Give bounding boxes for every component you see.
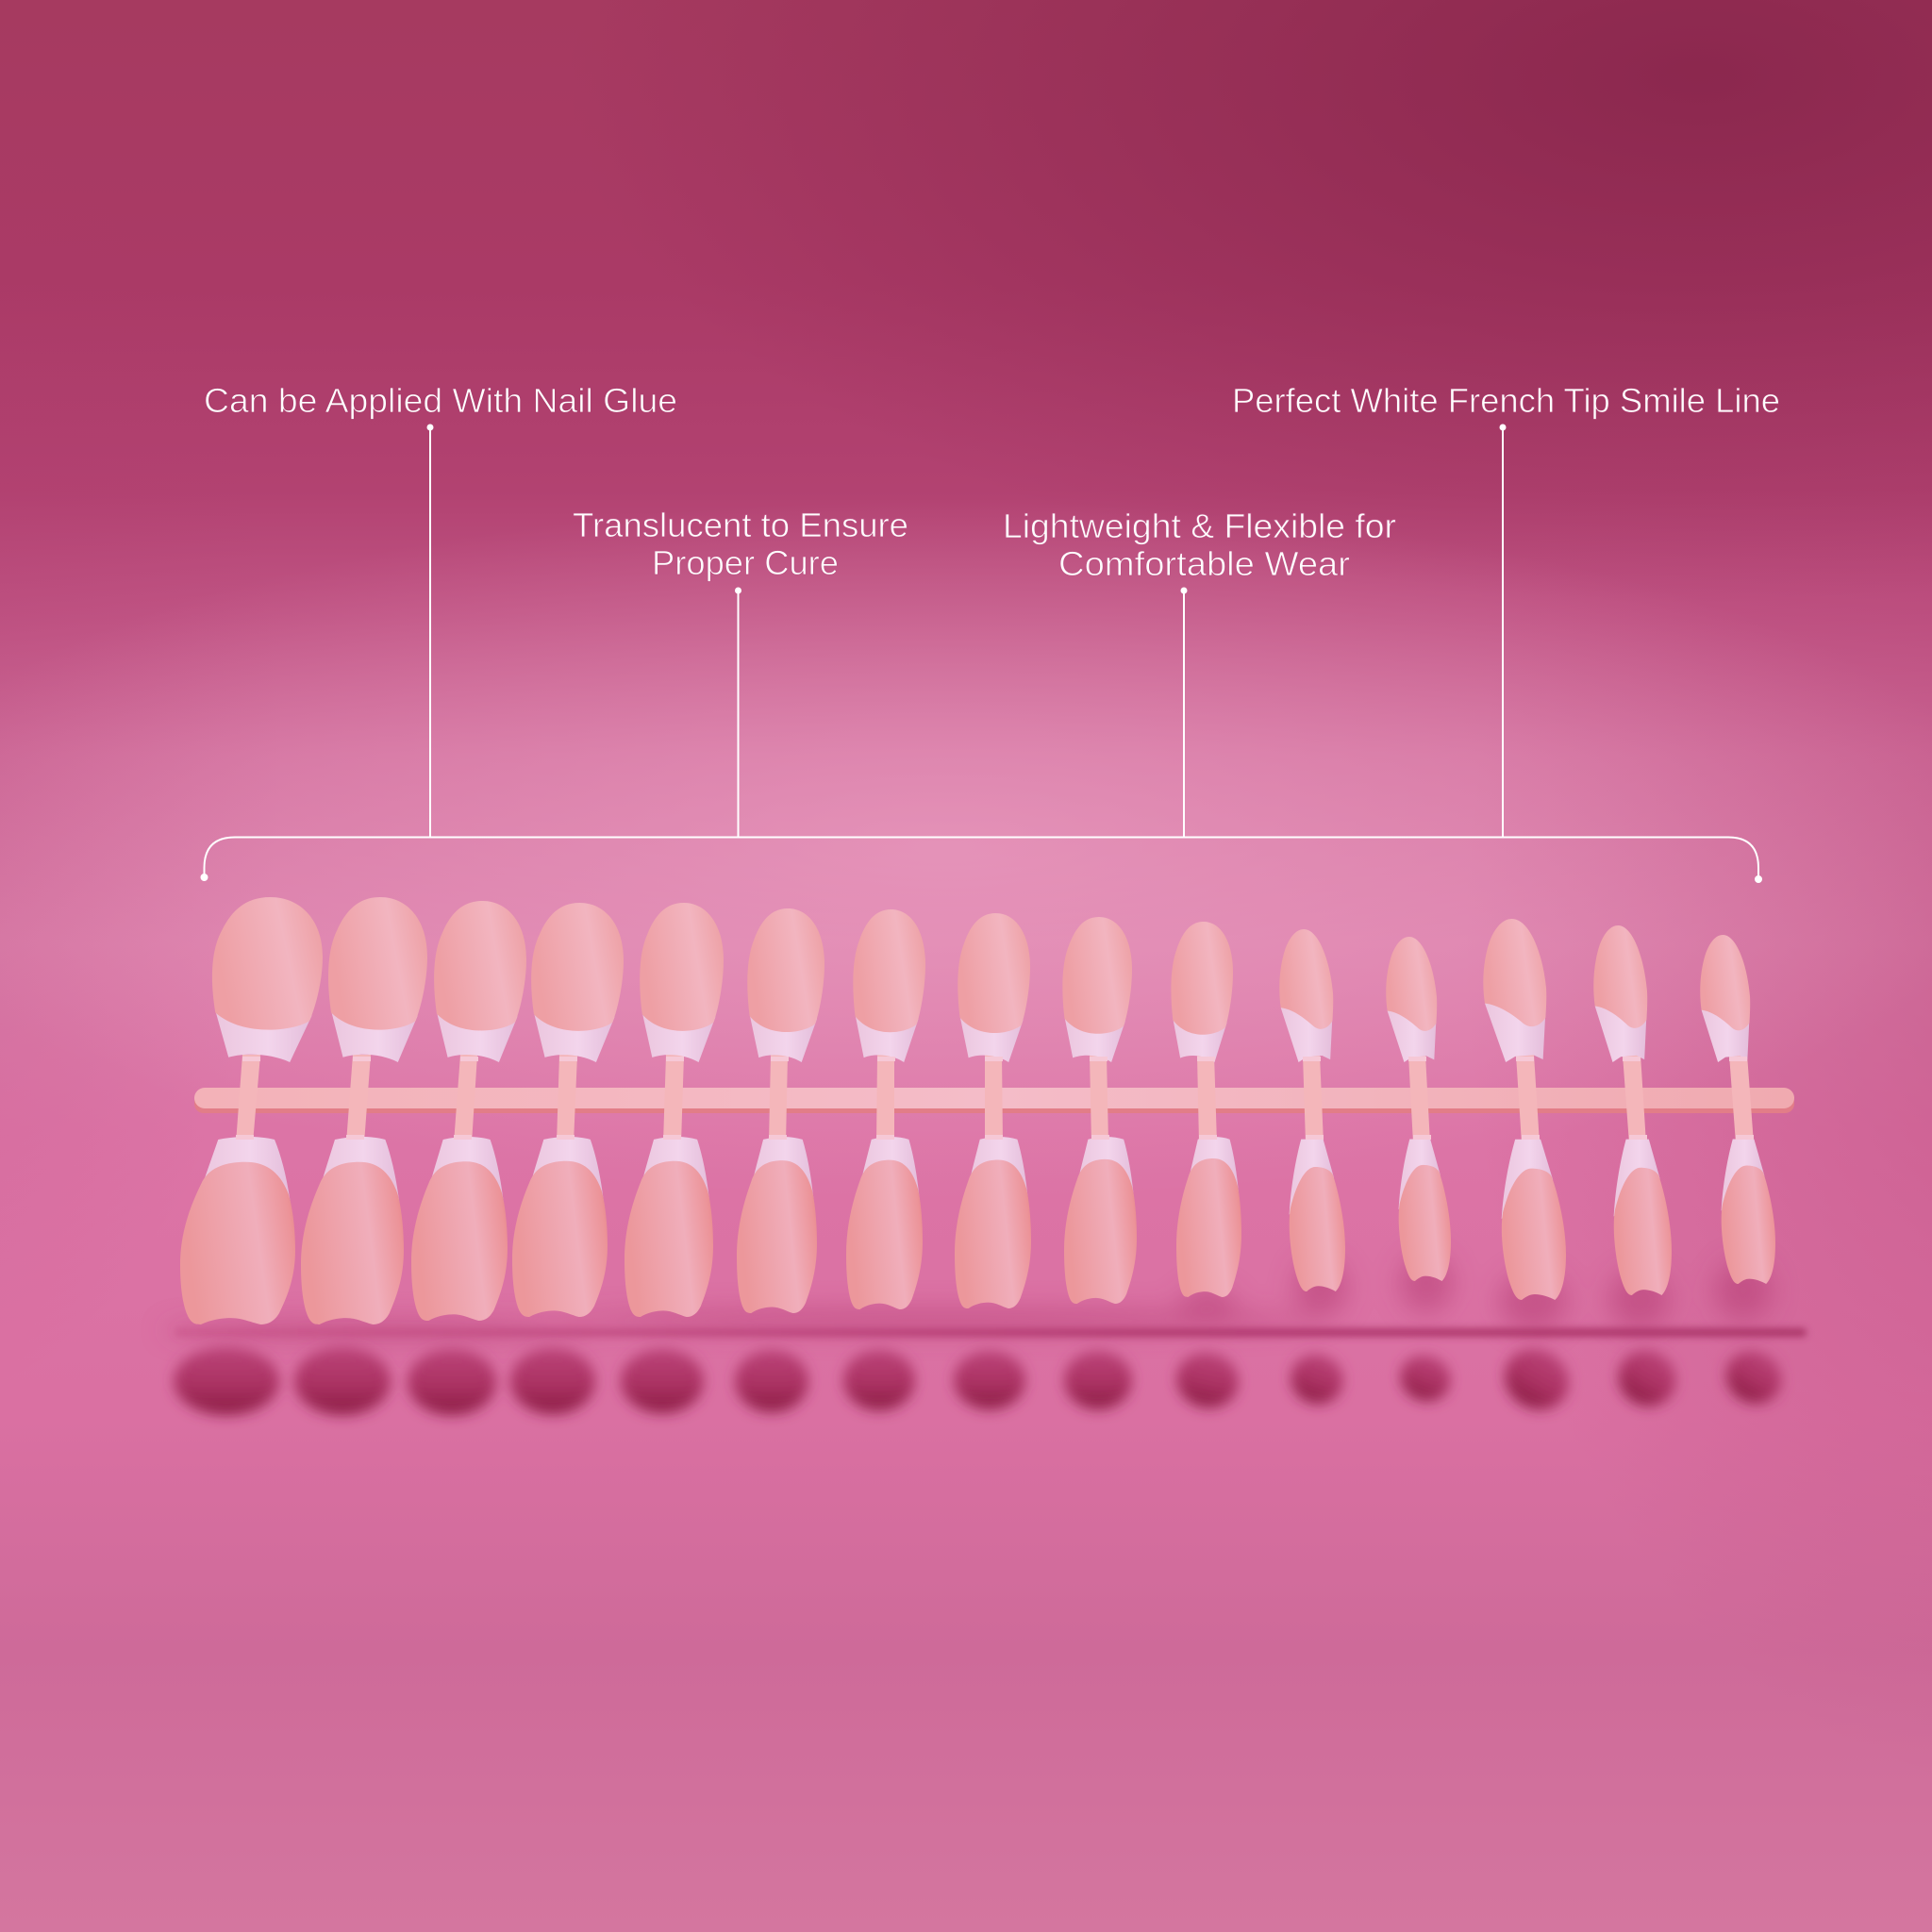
runner bar shadow edge (194, 1092, 1794, 1113)
top row nails (212, 897, 1750, 1062)
label: french tip: Perfect White French Tip Smile Line (1232, 381, 1780, 420)
callout bracket (202, 838, 1761, 882)
runner bar (194, 1088, 1794, 1108)
label: translucent: Translucent to Ensure (573, 506, 908, 544)
soft nail shadows (160, 1253, 1772, 1340)
leader: lightweight (1181, 589, 1187, 837)
nail tip sheet (180, 897, 1794, 1324)
label: lightweight: Lightweight & Flexible for (1003, 507, 1396, 545)
ground shadows (160, 1253, 1807, 1421)
nail drop shadows (174, 1338, 1790, 1421)
label: translucent (573, 506, 908, 582)
bottom row nails (180, 1137, 1775, 1324)
label: nail glue: Can be Applied With Nail Glue (204, 381, 677, 420)
label: lightweight: Comfortable Wear (1058, 544, 1350, 583)
long bar shadow (175, 1328, 1807, 1337)
label: lightweight (1003, 507, 1396, 583)
stem attachment tabs (236, 1057, 1754, 1140)
leader: french tip (1500, 425, 1506, 837)
label: translucent: Proper Cure (652, 543, 839, 582)
stems (236, 1055, 1754, 1143)
leader: nail glue (428, 425, 432, 837)
leader: translucent (736, 589, 741, 837)
